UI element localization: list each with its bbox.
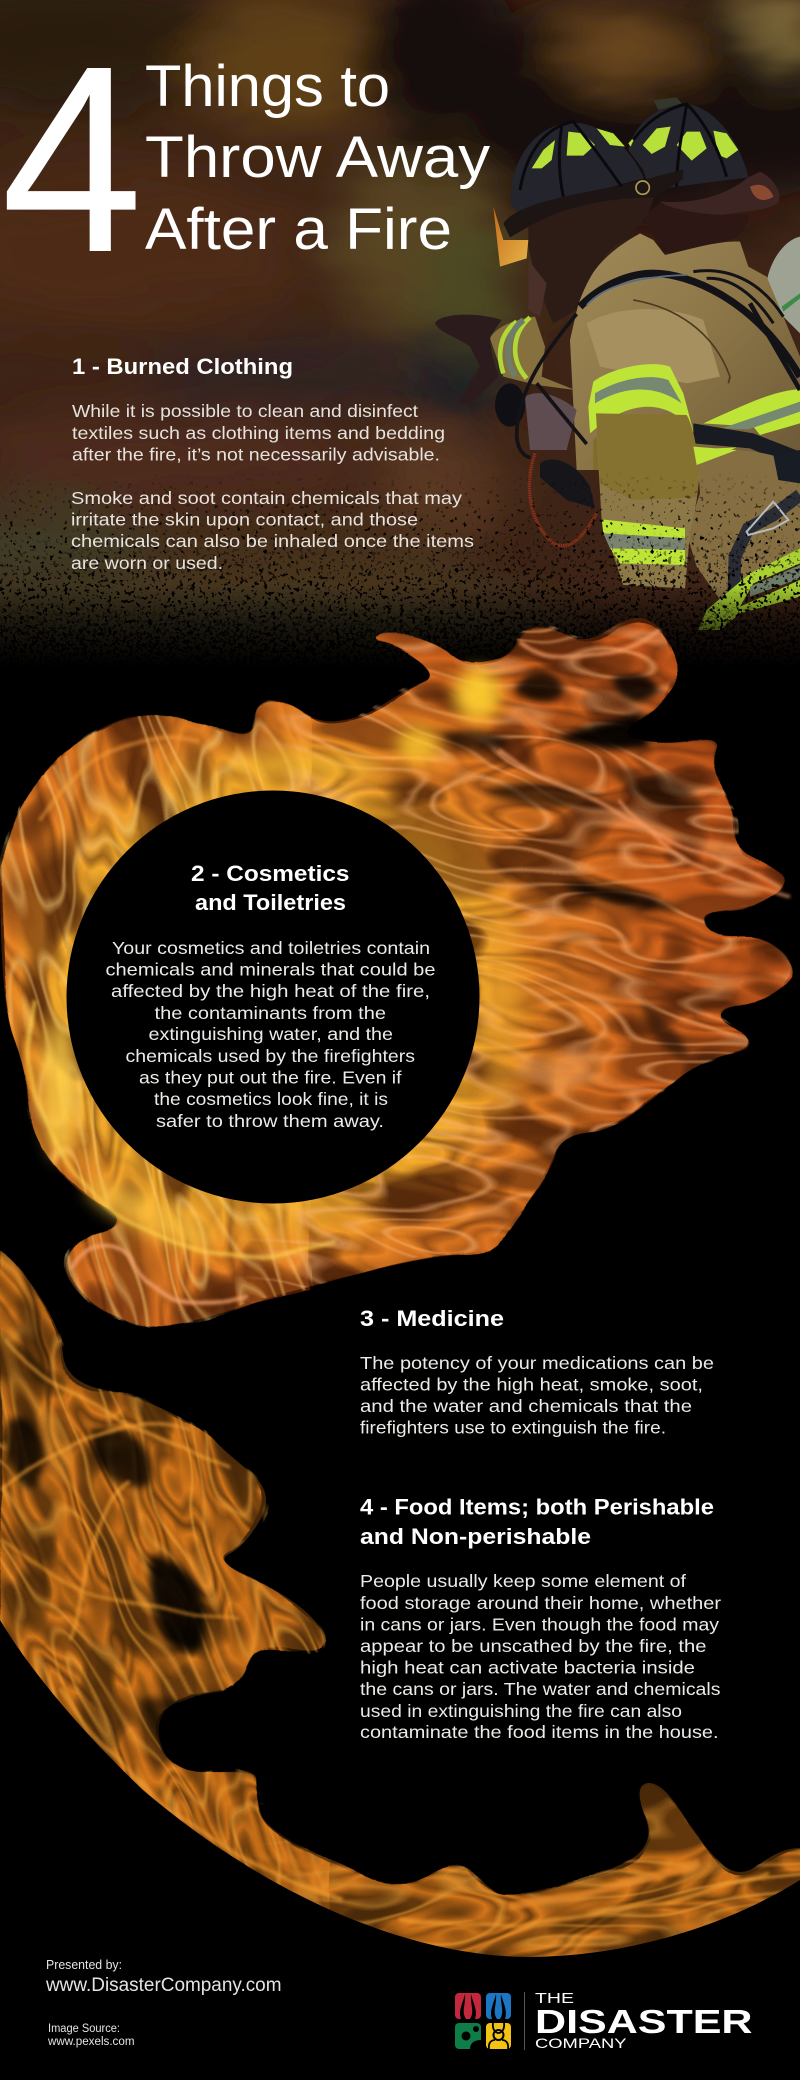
mask detail	[528, 260, 547, 317]
website url: www.DisasterCompany.com	[45, 1975, 282, 1996]
title line 3: After a Fire	[145, 197, 452, 262]
heading 1: 1 - Burned Clothing	[72, 354, 293, 379]
logo wordmark: COMPANY	[535, 2035, 627, 2051]
glove	[435, 315, 502, 405]
visor	[493, 207, 528, 267]
logo: the disaster company	[455, 1990, 752, 2051]
left sleeve stripes	[500, 317, 530, 378]
left sleeve	[490, 317, 575, 390]
back hood	[643, 203, 748, 253]
heading 2: and Toiletries	[195, 890, 346, 915]
body text 2: the cosmetics look fine, it is	[154, 1089, 388, 1109]
body text 3: firefighters use to extinguish the fire.	[360, 1418, 666, 1438]
icon: biohazard tile	[486, 2023, 511, 2049]
panel: hero photo background	[0, 0, 800, 680]
hem lime	[698, 548, 800, 630]
body text 4: in cans or jars. Even though the food may	[360, 1614, 719, 1634]
strap band	[693, 447, 737, 465]
heading 4	[360, 1494, 714, 1549]
air tank	[765, 237, 800, 333]
icon: mold tile	[455, 2023, 481, 2049]
lower sleeve	[597, 420, 699, 588]
body text 1: chemicals can also be inhaled once the items	[71, 531, 474, 551]
heading 4: and Non-perishable	[360, 1524, 591, 1549]
body text 1: While it is possible to clean and disinfect	[72, 401, 418, 421]
sleeve reflective band	[588, 364, 694, 433]
body text 4	[360, 1571, 721, 1742]
body text 2: safer to throw them away.	[156, 1111, 384, 1131]
dark pouch	[495, 383, 525, 427]
body text 1	[71, 401, 474, 573]
body text 4: food storage around their home, whether	[360, 1593, 721, 1613]
back helmet	[628, 97, 780, 215]
coiled hose	[529, 453, 597, 546]
regulator	[540, 459, 595, 508]
section 3: medicine	[360, 1306, 714, 1438]
section 2: cosmetics and toiletries	[106, 861, 436, 1131]
logo wordmark: THE	[535, 1990, 574, 2007]
body text 2: chemicals used by the firefighters	[126, 1046, 415, 1066]
logo wordmark	[535, 1990, 752, 2051]
body text 4: People usually keep some element of	[360, 1571, 686, 1591]
body text 3: The potency of your medications can be	[360, 1353, 714, 1373]
flame: lower left arc	[0, 1135, 800, 2041]
body text 3: affected by the high heat, smoke, soot,	[360, 1374, 703, 1394]
harness webbing	[733, 495, 800, 607]
heading 3: 3 - Medicine	[360, 1306, 504, 1331]
scba hoses	[517, 271, 800, 457]
body text 2: the contaminants from the	[154, 1003, 386, 1023]
body text 1: irritate the skin upon contact, and those	[71, 510, 418, 530]
body text 4: high heat can activate bacteria inside	[360, 1658, 695, 1678]
shiny fitting	[525, 393, 577, 450]
jacket	[570, 233, 800, 470]
body text 2: chemicals and minerals that could be	[106, 960, 436, 980]
logo wordmark: DISASTER	[535, 2004, 752, 2041]
section 4: food items	[360, 1494, 721, 1742]
heading 2	[191, 861, 350, 915]
presented by label: Presented by:	[46, 1957, 122, 1972]
heading 4: 4 - Food Items; both Perishable	[360, 1494, 714, 1520]
title	[1, 11, 490, 308]
footer credits	[45, 1957, 282, 2048]
front hood	[528, 197, 653, 323]
image source: Image Source:	[48, 2023, 120, 2035]
big numeral 4: 4	[1, 11, 143, 308]
elbow patch	[593, 436, 599, 470]
body text 2: affected by the high heat of the fire,	[111, 981, 430, 1001]
body text 2: extinguishing water, and the	[148, 1024, 393, 1044]
elbow patch lower	[596, 413, 698, 500]
body text 1: Smoke and soot contain chemicals that may	[71, 488, 462, 508]
body text 4: used in extinguishing the fire can also	[360, 1701, 682, 1721]
body text 4: appear to be unscathed by the fire, the	[360, 1636, 706, 1656]
title line 2: Throw Away	[145, 125, 490, 190]
panel: black circle	[66, 790, 480, 1204]
grunge transition into black	[0, 440, 800, 680]
heading 2: 2 - Cosmetics	[191, 861, 350, 886]
body text 4: the cans or jars. The water and chemicals	[360, 1679, 721, 1699]
firefighters photo	[435, 97, 800, 470]
body text 1: are worn or used.	[71, 553, 223, 573]
flame: central fireball	[0, 541, 800, 1403]
body text 2: as they put out the fire. Even if	[139, 1068, 402, 1088]
body text 2: Your cosmetics and toiletries contain	[112, 938, 430, 958]
chest strap	[693, 423, 800, 470]
front helmet	[503, 122, 683, 237]
torso reflective band	[703, 389, 800, 435]
body text 1: after the fire, it’s not necessarily advisable.	[72, 444, 440, 464]
body text 3: and the water and chemicals that the	[360, 1396, 692, 1416]
icon: fire tile	[455, 1993, 481, 2019]
body text 3	[360, 1353, 714, 1438]
cuff lime	[602, 519, 685, 538]
body text 1: textiles such as clothing items and bedding	[72, 423, 445, 443]
image source url: www.pexels.com	[47, 2036, 135, 2048]
title line 1: Things to	[145, 54, 390, 119]
right leg tan	[687, 449, 800, 607]
firefighter lower body	[529, 413, 800, 630]
section 1: burned clothing	[71, 354, 474, 573]
body text 4: contaminate the food items in the house.	[360, 1722, 718, 1742]
logo divider	[524, 1992, 525, 2050]
body text 2	[106, 938, 436, 1131]
icon: water tile	[486, 1993, 511, 2019]
